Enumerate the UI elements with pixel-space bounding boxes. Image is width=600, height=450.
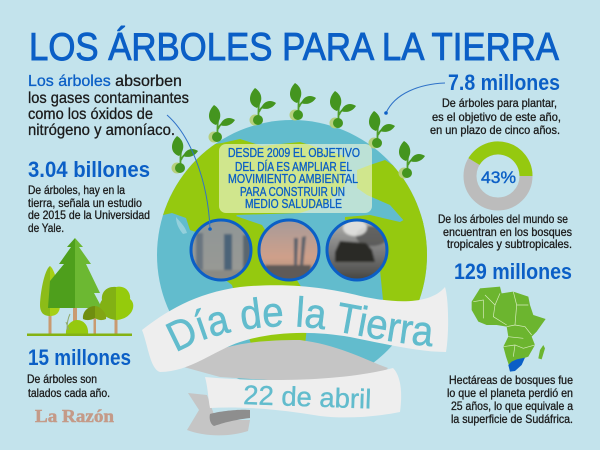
text: tropical forests: De los árboles del mundo se <box>438 212 568 226</box>
stat: 7.8 millones: De árboles para plantar, <box>442 96 557 110</box>
stat: 7.8 millones: es el objetivo de este año, <box>432 110 561 124</box>
ribbon: grey tail <box>187 393 250 435</box>
stat: 7.8 millones: en un plazo de cinco años. <box>430 123 560 137</box>
logo: La Razón: La Razón <box>35 406 114 426</box>
text: lost forests <box>447 373 573 426</box>
callout: goal message: DEL DÍA ES AMPLIAR EL <box>235 159 352 174</box>
ribbon: grey fold <box>180 340 388 382</box>
arrow: from 7.8 millones to sprout <box>384 83 445 115</box>
ribbon text: 22 de abril: 22 de abril <box>243 380 372 414</box>
stat: 3.04 billones: tierra, señala un estudio <box>28 196 142 210</box>
callout: goal message: MOVIMIENTO AMBIENTAL <box>228 171 358 186</box>
text: lost forests: la superficie de Sudáfrica. <box>451 412 573 426</box>
text: tropical forests <box>438 212 572 251</box>
callout: goal message: PARA CONSTRUIR UN <box>240 184 345 199</box>
stat: 7.8 millones <box>430 70 561 137</box>
stat: 3.04 billones: de 2015 de la Universidad <box>28 208 150 222</box>
globe <box>150 120 430 390</box>
ribbon: lower band <box>205 368 401 417</box>
ribbon: stripes <box>210 410 250 426</box>
intro text: Los árboles absorben <box>28 73 182 90</box>
ribbon text: Día de la Tierra: Día de la Tierra <box>166 296 432 352</box>
heading: 129 millones: 129 millones <box>454 259 572 284</box>
intro text: los gases contaminantes <box>28 90 189 107</box>
intro text <box>28 73 189 139</box>
stat: 7.8 millones: 7.8 millones <box>448 70 560 95</box>
donut chart: 43% <box>470 148 526 204</box>
callout: goal message <box>219 144 372 213</box>
stat: 15 millones: 15 millones <box>28 345 131 370</box>
text: lost forests: lo que el planeta perdió en <box>447 386 573 400</box>
stat: 3.04 billones: De árboles, hay en la <box>28 183 125 197</box>
sprouts on globe <box>172 83 425 178</box>
stat: 15 millones: De árboles son <box>27 372 97 386</box>
stat: 3.04 billones: de Yale. <box>28 221 64 235</box>
intro text: nitrógeno y amoníaco. <box>28 122 175 139</box>
photo: smog towers <box>190 218 252 282</box>
callout: goal message: MEDIO SALUDABLE <box>245 196 342 211</box>
stat: 3.04 billones: 3.04 billones <box>28 157 150 182</box>
text: tropical forests: tropicales y subtropicales. <box>447 237 572 251</box>
stat: 3.04 billones <box>28 157 150 235</box>
text: lost forests: Hectáreas de bosques fue <box>449 373 573 387</box>
stat: 15 millones: talados cada año. <box>28 386 110 400</box>
icon: forest illustration <box>27 238 133 336</box>
callout: goal message: DESDE 2009 EL OBJETIVO <box>228 145 360 160</box>
stat: 15 millones <box>27 345 131 400</box>
text: tropical forests: encuentran en los bosques <box>443 225 572 239</box>
ribbon: main band <box>142 285 448 372</box>
photo: hazy city <box>258 218 320 282</box>
photo: smoking factory <box>326 218 388 282</box>
ribbon banner <box>142 285 448 435</box>
map: Africa <box>472 287 546 372</box>
donut chart: 43%: 43% <box>481 168 516 187</box>
text: lost forests: 25 años, lo que equivale a <box>451 399 573 413</box>
intro text: como los óxidos de <box>28 106 153 123</box>
arrow: from intro text to photo <box>167 115 212 231</box>
